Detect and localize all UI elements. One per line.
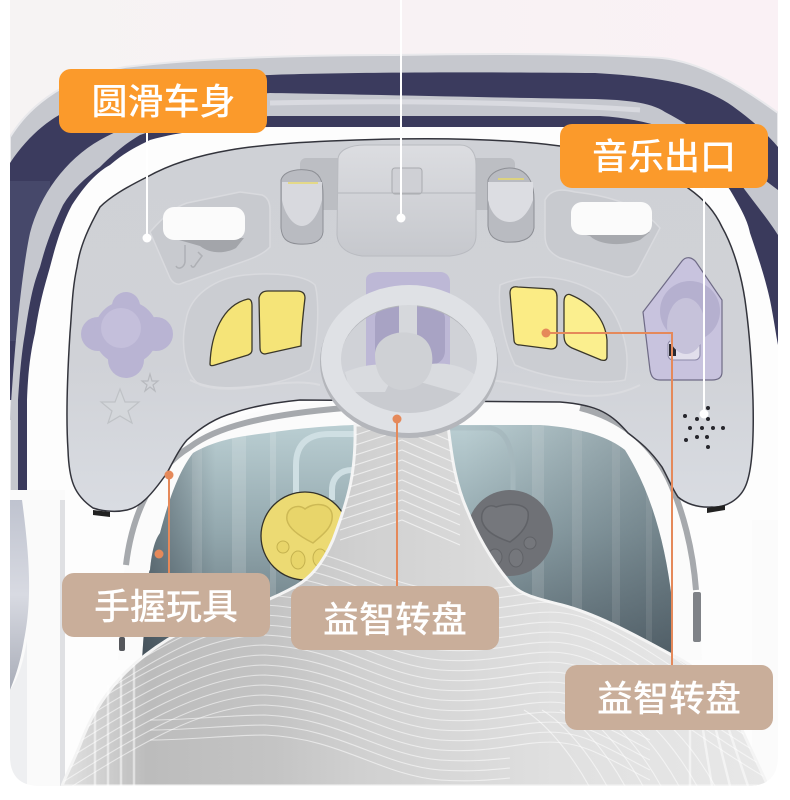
callout dot	[154, 550, 164, 558]
hub	[375, 332, 432, 390]
button body	[571, 202, 652, 235]
joystick neck	[667, 298, 705, 354]
icon: right white button	[571, 202, 652, 244]
icon: left white button	[163, 207, 245, 252]
left cylinder	[281, 170, 323, 244]
label: 圆滑车身	[59, 69, 267, 133]
right cylinder cap	[488, 182, 533, 222]
icon: speaker holes	[683, 406, 725, 449]
icon: music notes	[176, 245, 202, 268]
module body	[337, 145, 476, 256]
callout line: center module	[396, 0, 406, 222]
left cylinder cap	[282, 182, 322, 226]
callout line: center puzzle dial	[392, 414, 402, 588]
module back ledge	[300, 158, 515, 210]
outer grey shell	[10, 54, 778, 500]
purple panel behind wheel	[366, 272, 450, 376]
highlight stripe on band	[270, 102, 640, 110]
label: 音乐出口	[560, 124, 768, 188]
callout line: music outlet	[700, 186, 708, 418]
slot dark	[669, 344, 676, 356]
icon: yellow pad 1	[210, 299, 252, 366]
callout line: smooth body	[142, 130, 152, 242]
icon: small star	[142, 374, 158, 391]
icon: yellow pad 3	[510, 287, 557, 349]
heart	[482, 504, 528, 542]
seat side stripes	[95, 665, 748, 786]
toes	[277, 541, 289, 553]
steering column	[375, 305, 445, 365]
left frame edge line	[60, 500, 65, 786]
navy thin stripe	[18, 116, 778, 490]
label: 益智转盘 center: 益智转盘	[323, 599, 467, 640]
toes	[524, 537, 536, 549]
module seam	[338, 192, 476, 194]
label: 手握玩具: 手握玩具	[94, 586, 238, 627]
lower hub fill	[345, 368, 475, 415]
button body	[163, 207, 245, 240]
disc	[467, 490, 553, 576]
right pad surround	[499, 277, 627, 382]
plate	[643, 258, 722, 380]
right back arch	[450, 428, 513, 490]
button shadow	[575, 232, 650, 244]
right cylinder accent	[498, 178, 524, 180]
label: 益智转盘 center	[291, 586, 499, 650]
grey inner stripe	[126, 408, 696, 590]
lower console contour	[190, 380, 640, 396]
label: 益智转盘 right: 益智转盘	[597, 678, 741, 719]
navy body band	[10, 72, 778, 400]
top spoke	[399, 300, 417, 340]
bottom left wash	[10, 640, 27, 786]
right white frame shade	[752, 520, 778, 786]
button shadow	[172, 238, 244, 252]
seat	[50, 420, 770, 800]
console	[67, 139, 753, 511]
joystick slot	[668, 340, 700, 360]
left spoke	[345, 364, 395, 392]
pink backdrop	[10, 0, 778, 134]
left cylinder accent	[288, 182, 318, 184]
contour lines	[50, 420, 770, 800]
icon: yellow paw disc	[261, 492, 349, 580]
edge darkening	[140, 420, 680, 670]
label: 益智转盘 right	[565, 665, 773, 730]
console underside feet	[93, 505, 725, 517]
side slot right	[693, 592, 701, 642]
center module	[281, 145, 534, 256]
label: 音乐出口: 音乐出口	[592, 136, 736, 177]
grey inner band	[10, 93, 778, 420]
lower left white cover	[10, 490, 27, 501]
icon: steering wheel	[330, 295, 488, 428]
label: 手握玩具	[62, 573, 270, 637]
joystick ball	[660, 281, 720, 341]
icon: yellow pad 4	[564, 294, 607, 360]
callout line: right puzzle dial	[542, 328, 672, 666]
left plate	[150, 192, 270, 284]
seat fabric	[62, 425, 768, 786]
right plate	[545, 190, 660, 277]
heart	[287, 505, 332, 543]
callout line: hand toy	[164, 470, 174, 574]
icon: yellow pad 2	[259, 291, 305, 354]
icon: purple teether ball	[81, 292, 173, 378]
lower left side shading	[10, 500, 29, 690]
label: 圆滑车身: 圆滑车身	[91, 81, 236, 122]
white frame	[27, 127, 778, 501]
icon: large star	[101, 389, 139, 423]
rounded back arches	[296, 434, 360, 500]
right spoke	[420, 363, 478, 394]
icon: grey paw disc	[467, 490, 553, 576]
left pad surround	[184, 274, 318, 389]
navy lower-left haze	[10, 181, 50, 341]
wheel shadow	[330, 296, 488, 428]
outer white ring below console	[118, 400, 702, 660]
right cylinder	[488, 168, 534, 242]
disc	[261, 492, 349, 580]
cavity	[142, 425, 671, 656]
module top clip	[392, 168, 422, 194]
wheel rim	[331, 295, 487, 423]
icon: purple joystick plate	[643, 258, 722, 380]
vertical ribs	[192, 420, 652, 660]
cavity backing	[142, 425, 671, 656]
side slot left	[119, 637, 125, 651]
